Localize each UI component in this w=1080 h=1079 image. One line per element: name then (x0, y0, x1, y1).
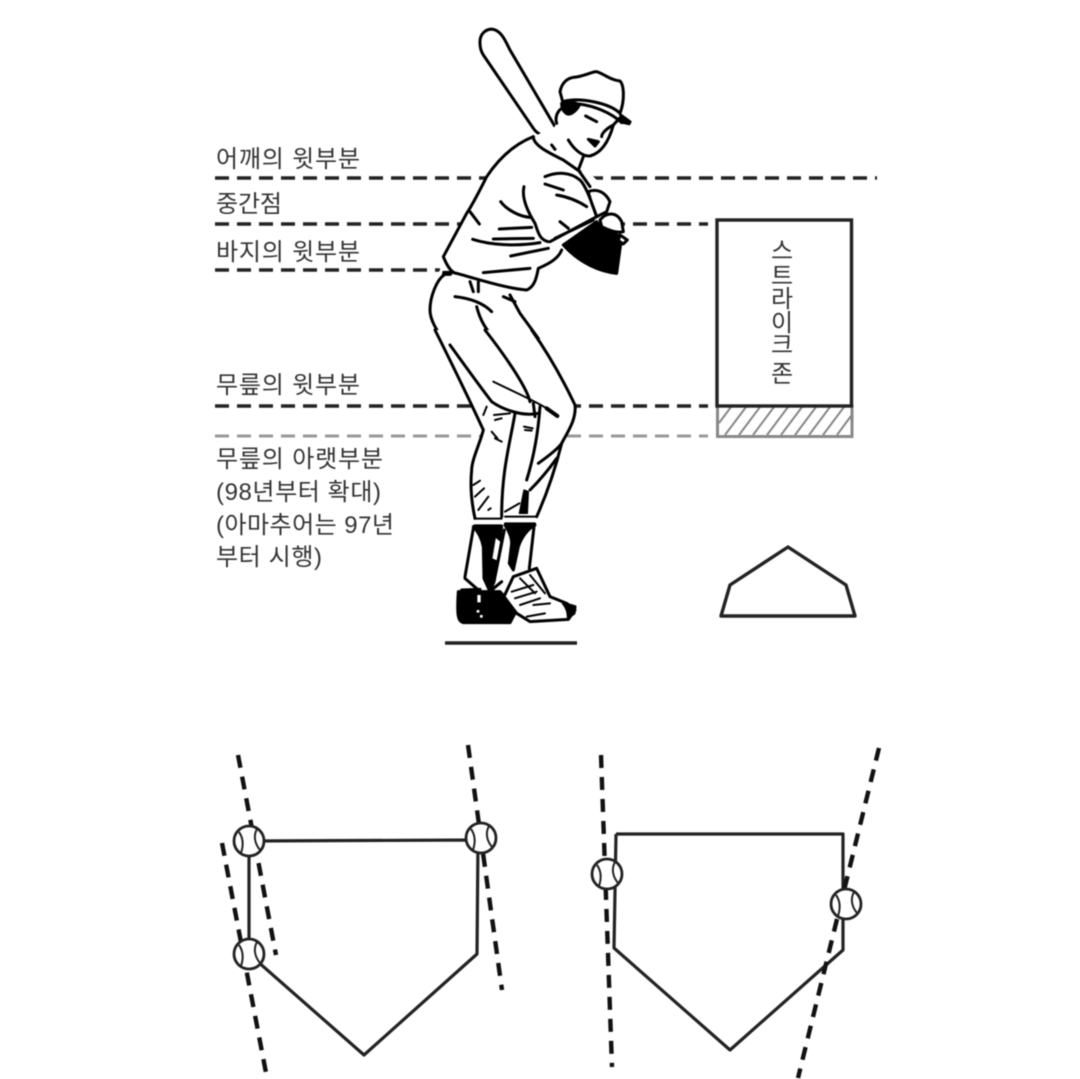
vertical label: strike zone (771, 238, 793, 388)
height labels: 바지의 윗부분 (216, 239, 360, 266)
diagram: balls touching plate, right (592, 748, 879, 1078)
height labels: 무릎의 윗부분 (216, 372, 360, 399)
home plate: side view (721, 547, 855, 616)
height labels: 어깨의 윗부분 (216, 146, 360, 173)
batter illustration (430, 29, 631, 623)
diagram: balls touching plate, left (222, 745, 502, 1078)
vertical label: strike zone: 트 (771, 263, 793, 290)
height labels (216, 146, 394, 571)
height labels: 무릎의 아랫부분 (216, 446, 383, 473)
vertical label: strike zone: 존 (771, 361, 793, 388)
ball (831, 889, 861, 919)
ball (466, 823, 496, 853)
vertical label: strike zone: 스 (771, 238, 793, 265)
height labels: (아마추어는 97년 (216, 512, 394, 539)
level lines: dashed height guides (215, 178, 877, 436)
vertical label: strike zone: 크 (771, 332, 793, 359)
height labels: 중간점 (216, 191, 282, 218)
height labels: (98년부터 확대) (216, 479, 381, 506)
ground line (445, 641, 577, 645)
ball (234, 939, 264, 969)
hatched low zone (718, 406, 852, 436)
height labels: 부터 시행) (216, 544, 322, 571)
vertical label: strike zone: 이 (771, 310, 793, 337)
strike zone box (717, 220, 852, 436)
ball (234, 826, 264, 856)
ball (592, 859, 622, 889)
vertical label: strike zone: 라 (771, 286, 793, 313)
